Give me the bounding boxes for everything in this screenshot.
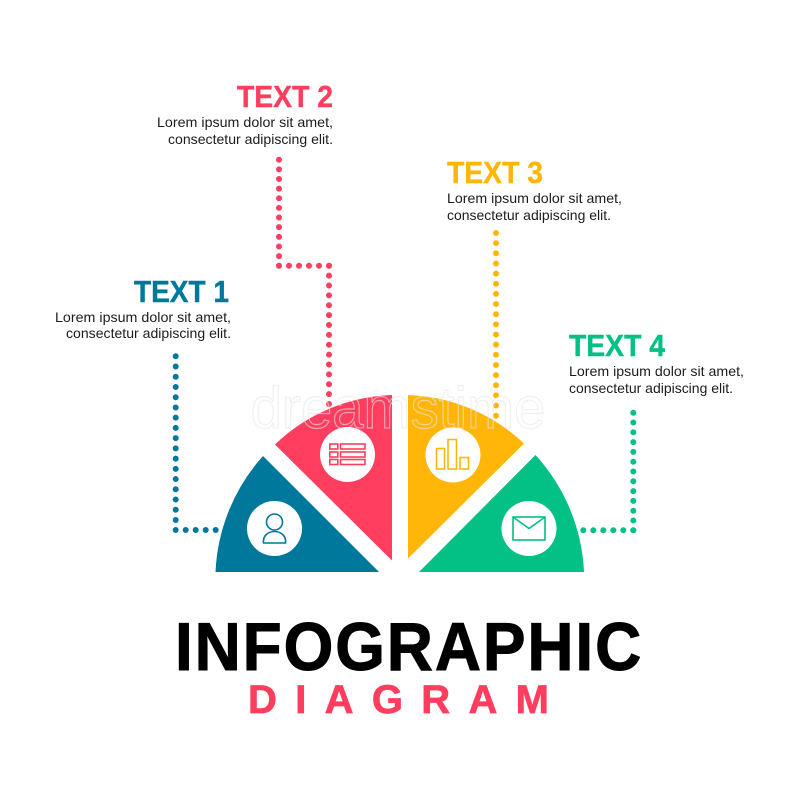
segment: red — [275, 395, 392, 560]
title: INFOGRAPHIC — [175, 608, 641, 684]
text block 2: Lorem ipsum dolor sit amet, — [157, 115, 333, 130]
text block 3 — [447, 155, 622, 223]
text block 2 — [157, 79, 333, 147]
text block 3: Lorem ipsum dolor sit amet, — [447, 191, 622, 206]
segment: blue — [216, 456, 379, 572]
connector: red dotted line — [279, 160, 329, 404]
icon: bar chart — [426, 428, 480, 482]
watermark: dreamstime — [250, 376, 546, 441]
text block 4 — [569, 328, 744, 396]
icon: envelope — [502, 501, 556, 556]
connector: green dotted line — [583, 413, 633, 530]
text block 3: TEXT 3 — [447, 155, 543, 190]
connector: yellow dotted line — [493, 233, 499, 416]
text block 4: consectetur adipiscing elit. — [569, 381, 733, 396]
icon: table — [320, 427, 375, 482]
text block 4: TEXT 4 — [569, 328, 666, 363]
text block 1: Lorem ipsum dolor sit amet, — [55, 310, 231, 325]
text block 2: TEXT 2 — [237, 79, 333, 114]
segment: green — [419, 455, 584, 572]
segment: yellow — [408, 395, 524, 558]
text block 1 — [55, 274, 231, 341]
connector: blue dotted line — [176, 356, 216, 530]
text block 3: consectetur adipiscing elit. — [447, 208, 611, 223]
text block 4: Lorem ipsum dolor sit amet, — [569, 364, 744, 379]
text block 1: consectetur adipiscing elit. — [66, 326, 231, 341]
icon: user — [247, 501, 302, 556]
text block 1: TEXT 1 — [134, 274, 229, 309]
text block 2: consectetur adipiscing elit. — [168, 132, 333, 147]
subtitle: DIAGRAM — [248, 678, 549, 722]
